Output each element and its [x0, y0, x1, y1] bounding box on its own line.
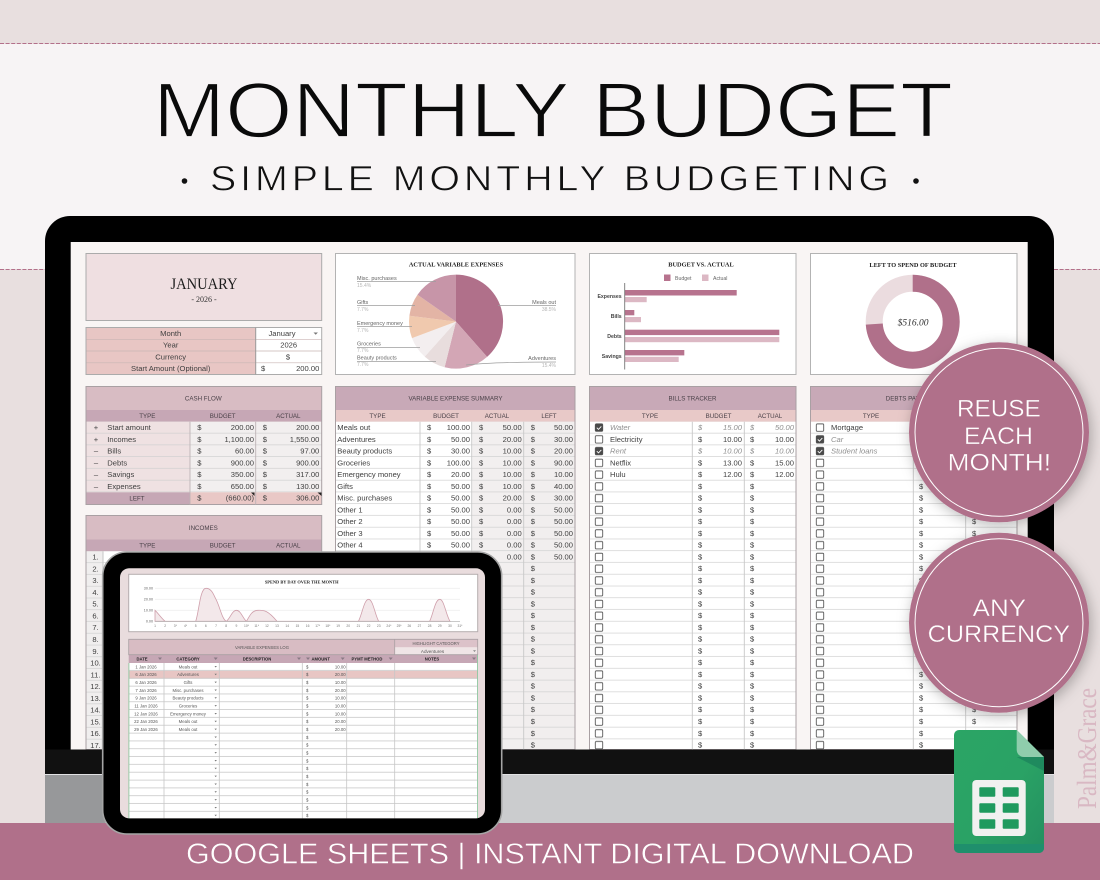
- panel: variable expense summary: 50.00: [554, 541, 573, 550]
- table: variable expenses log: 7 Jan 2026: [135, 688, 157, 693]
- table: variable expenses log: PYMT METHOD: [352, 657, 382, 662]
- checkboxes: [594, 422, 605, 750]
- panel: variable expense summary: 20.00: [451, 470, 470, 479]
- panel: variable expense summary: Other 3: [337, 529, 363, 538]
- panel: variable expense summary: $$$$$$$$$$$$$$$$$$$$$$$$$$$$: [531, 423, 536, 750]
- table: variable expenses log: VARIABLE EXPENSES LOG: [235, 645, 289, 650]
- panel: january heading: - 2026 -: [191, 295, 217, 304]
- badge: any currency: CURRENCY: [928, 621, 1070, 648]
- table: variable expenses log: Meals out: [179, 719, 198, 724]
- panel: pie chart actual variable expenses: Beauty products: [357, 356, 397, 362]
- panel: settings table: Start Amount (Optional): [131, 364, 211, 373]
- chart: spend by day over the month: 11*: [254, 624, 260, 628]
- panel: variable expense summary: LEFT: [541, 413, 557, 420]
- chart: spend by day over the month: 24*: [386, 624, 392, 628]
- panel: variable expense summary: 50.00: [554, 552, 573, 561]
- bars: [625, 290, 779, 362]
- screen background: [71, 242, 1028, 750]
- table: variable expenses log: DATE: [136, 657, 148, 662]
- panel: variable expense summary: 0.00: [507, 505, 522, 514]
- chart: spend by day over the month: 17*: [315, 624, 321, 628]
- panel: variable expense summary: Groceries: [337, 458, 370, 467]
- panel: variable expense summary: 10.00: [503, 458, 522, 467]
- panel: variable expense summary: 0.00: [507, 517, 522, 526]
- chart: spend by day over the month: 2: [164, 624, 166, 628]
- table: variable expenses log: 10.00: [335, 704, 346, 708]
- table: variable expenses log: 29 Jan 2026: [134, 727, 158, 732]
- panel: cash flow: $: [263, 435, 268, 444]
- panel: bills tracker: 12.00: [775, 470, 794, 479]
- panel: cash flow: Debts: [107, 458, 127, 467]
- table: variable expenses log: Beauty products: [172, 696, 204, 701]
- panel: cash flow: 1,550.00: [290, 435, 319, 444]
- chart: spend by day over the month: 31*: [458, 624, 463, 628]
- chart: spend by day over the month: SPEND BY DAY OVER THE MONTH: [265, 580, 339, 584]
- panel: cash flow: ACTUAL: [276, 413, 301, 420]
- panel: cash flow: 1,100.00: [224, 435, 254, 444]
- panel: variable expense summary: Other 2: [337, 517, 363, 526]
- panel: bills tracker: $: [697, 423, 703, 432]
- table: variable expenses log: Adventures: [421, 649, 445, 654]
- panel: pie chart actual variable expenses: 15.4%: [357, 283, 372, 289]
- chart: spend by day over the month: 26: [407, 624, 411, 628]
- panel: cash flow: $: [263, 458, 268, 467]
- panel: cash flow: $: [263, 470, 268, 479]
- panel: bills tracker: Hulu: [610, 470, 626, 479]
- panel: variable expense summary: 50.00: [451, 494, 470, 503]
- panel: incomes: 2.: [92, 564, 99, 573]
- chart: spend by day over the month: 29: [438, 624, 442, 628]
- panel: cash flow: –: [94, 458, 99, 467]
- panel: budget vs actual bar chart: Debts: [607, 334, 622, 340]
- panel: budget vs actual bar chart: [590, 254, 796, 374]
- panel: cash flow: +: [94, 435, 99, 444]
- table: variable expenses log: $$$$$$$$$$$$$$$$$$$$: [306, 664, 309, 818]
- panel: pie chart actual variable expenses: Meals out: [532, 300, 556, 306]
- table: variable expenses log: 10.00: [335, 696, 346, 701]
- panel: variable expense summary: 0.00: [507, 552, 522, 561]
- panel: cash flow: (660.00): [226, 494, 254, 503]
- chart: spend by day over the month: 30.00: [144, 587, 153, 591]
- panel: settings table: 2026: [280, 341, 297, 350]
- chart: spend by day over the month: 22: [367, 624, 371, 628]
- panel: settings table: Month: [160, 329, 181, 338]
- panel: cash flow: 200.00: [231, 423, 254, 432]
- panel: bills tracker: Electricity: [610, 435, 643, 444]
- panel: bills tracker: 50.00: [775, 423, 795, 432]
- chart: spend by day over the month: 18*: [325, 624, 331, 628]
- panel: settings table: Currency: [155, 352, 186, 362]
- table: variable expenses log: Adventures: [177, 672, 199, 677]
- panel: variable expense summary: 30.00: [451, 446, 470, 456]
- panel: incomes: 9.: [92, 647, 99, 656]
- chart: spend by day over the month: 30: [448, 624, 452, 628]
- panel: bills tracker: 13.00: [723, 458, 742, 467]
- panel: incomes: [86, 516, 322, 750]
- panel: cash flow: Bills: [107, 446, 121, 456]
- table: variable expenses log: 22 Jan 2026: [134, 719, 158, 724]
- panel: settings table: Year: [163, 341, 179, 350]
- subtitle: SIMPLE MONTHLY BUDGETING: [210, 159, 893, 198]
- panel: debts payments: DEBTS PAYMENTS: [886, 396, 941, 402]
- chart: spend by day over the month: 3*: [174, 624, 178, 628]
- table: variable expenses log: 20.00: [335, 719, 346, 724]
- panel: variable expense summary: 100.00: [447, 423, 470, 432]
- panel: bills tracker: $$$$$$$$$$$$$$$$$$$$$$$$$$: [698, 435, 703, 750]
- chart: spend by day over the month: 5: [195, 624, 197, 628]
- panel: bills tracker: 10.00: [775, 435, 794, 444]
- table: variable expenses log: 12 Jan 2026: [134, 711, 158, 716]
- chart: spend by day over the month: 9: [235, 624, 237, 628]
- panel: cash flow: $: [197, 435, 202, 444]
- badge: reuse each month: REUSE: [957, 396, 1041, 423]
- panel: incomes: 5.: [92, 600, 99, 609]
- chart: spend by day over the month: 28: [428, 624, 432, 628]
- checkboxes: [815, 422, 826, 750]
- panel: variable expense summary: BUDGET: [433, 413, 459, 420]
- panel: variable expense summary: 10.00: [554, 470, 573, 479]
- panel: variable expense summary: Meals out: [337, 423, 371, 432]
- panel: bills tracker: 15.00: [775, 458, 794, 467]
- panel: incomes: 6.: [92, 612, 99, 620]
- icon: google sheets: [954, 730, 1044, 853]
- panel: variable expense summary: VARIABLE EXPENSE SUMMARY: [408, 396, 502, 402]
- panel: left to spend donut chart: $516.00: [898, 318, 929, 328]
- table: variable expenses log: NOTES: [425, 657, 439, 662]
- chart: spend by day over the month: 21: [357, 624, 360, 628]
- panel: left to spend donut chart: [810, 254, 1017, 374]
- panel: cash flow: CASH FLOW: [185, 396, 222, 402]
- panel: incomes: 4.: [92, 588, 99, 597]
- chart: spend by day over the month: 25*: [397, 624, 402, 628]
- chart: spend by day over the month: 12: [265, 624, 269, 628]
- panel: cash flow: 306.00: [296, 494, 319, 503]
- panel: cash flow: 130.00: [296, 482, 319, 491]
- panel: variable expense summary: Emergency money: [337, 470, 401, 479]
- table: variable expenses log: HIGHLIGHT CATEGORY: [412, 641, 460, 646]
- panel: incomes: 10.: [90, 658, 101, 668]
- panel: cash flow: BUDGET: [210, 413, 236, 420]
- legend: [664, 274, 727, 282]
- panel: debts payments: $$$$$$$: [972, 505, 977, 750]
- table: variable expenses log: Groceries: [179, 704, 197, 708]
- panel: incomes: 1.: [92, 553, 99, 562]
- panel: cash flow: $: [197, 482, 202, 491]
- panel: variable expense summary: Gifts: [337, 482, 353, 491]
- panel: budget vs actual bar chart: BUDGET VS. ACTUAL: [668, 262, 734, 268]
- laptop monitor frame: [45, 216, 1054, 780]
- panel: pie chart actual variable expenses: 15.4%: [542, 363, 557, 369]
- panel: variable expense summary: 50.00: [451, 529, 470, 538]
- panel: variable expense summary: 90.00: [554, 458, 573, 467]
- panel: variable expense summary: 100.00: [447, 458, 470, 467]
- panel: variable expense summary: 20.00: [554, 446, 573, 456]
- panel: pie chart actual variable expenses: 7.7%: [357, 307, 369, 313]
- chart: spend by day over the month: 10.00: [144, 609, 153, 613]
- panel: variable expense summary: [336, 386, 575, 750]
- panel: settings table: [86, 328, 322, 374]
- panel: variable expense summary: 50.00: [554, 505, 573, 514]
- panel: variable expense summary: Other 4: [337, 541, 363, 550]
- table: variable expenses log: Meals out: [179, 727, 198, 732]
- chart: spend by day over the month: 27: [418, 624, 421, 628]
- panel: cash flow: $: [263, 446, 268, 456]
- panel: settings table: $: [261, 364, 266, 373]
- panel: pie chart actual variable expenses: Gifts: [357, 300, 369, 306]
- panel: variable expense summary: 50.00: [451, 541, 470, 550]
- chart: spend by day over the month: 1: [154, 624, 156, 628]
- panel: cash flow: Incomes: [107, 435, 136, 444]
- panel: pie chart actual variable expenses: 7.7%: [357, 348, 369, 354]
- chart: spend by day over the month: 10*: [244, 624, 250, 628]
- panel: cash flow: LEFT: [129, 496, 145, 502]
- legend: Budget: [675, 276, 692, 282]
- table: variable expenses log: 20.00: [335, 688, 346, 693]
- panel: incomes: 13.: [90, 694, 101, 703]
- panel: budget vs actual bar chart: Bills: [611, 314, 622, 320]
- panel: cash flow: $: [197, 470, 202, 479]
- panel: pie chart actual variable expenses: Emergency money: [357, 321, 403, 327]
- panel: incomes: 3.: [92, 576, 99, 585]
- panel: incomes: 17.: [90, 741, 101, 750]
- panel: variable expense summary: 30.00: [554, 494, 573, 503]
- panel: variable expense summary: 50.00: [451, 435, 470, 444]
- chart: spend by day over the month: 15: [296, 624, 299, 628]
- panel: cash flow: $: [197, 494, 202, 503]
- panel: cash flow: $: [197, 446, 202, 456]
- table: variable expenses log: Emergency money: [170, 711, 207, 716]
- panel: bills tracker: 15.00: [723, 423, 743, 432]
- tablet mockup: [103, 552, 502, 834]
- chart: spend by day over the month: 14: [285, 624, 289, 628]
- panel: budget vs actual bar chart: Savings: [602, 354, 622, 360]
- panel: cash flow: Savings: [107, 470, 135, 479]
- panel: bills tracker: $$$$$$$$$$$$$$$$$$$$$$$$$$: [750, 435, 755, 750]
- chart: spend by day over the month: 13: [275, 624, 279, 628]
- panel: debts payments: [810, 386, 1017, 750]
- panel: bills tracker: $: [749, 423, 755, 432]
- panel: variable expense summary: 10.00: [503, 446, 522, 456]
- chart: spend by day over the month: 23: [377, 624, 381, 628]
- panel: debts payments: Car: [831, 435, 844, 444]
- panel: variable expense summary: Misc. purchases: [337, 494, 392, 503]
- chart: spend by day over the month: 4*: [184, 624, 188, 628]
- panel: debts payments: TYPE: [863, 413, 879, 420]
- table: variable expenses log: 1 Jan 2026: [135, 664, 157, 669]
- chart: spend by day over the month: 19: [336, 624, 340, 628]
- panel: cash flow: $: [263, 482, 268, 491]
- panel: variable expense summary: Adventures: [337, 435, 376, 444]
- panel: variable expense summary: $$$$$$$$$$$: [479, 423, 484, 550]
- panel: incomes: ACTUAL: [276, 542, 301, 549]
- panel: pie chart actual variable expenses: Groceries: [357, 342, 381, 348]
- panel: debts payments: Mortgage: [831, 423, 863, 432]
- panel: bills tracker: 10.00: [723, 446, 743, 456]
- panel: variable expense summary: 20.00: [503, 435, 522, 444]
- panel: january heading: [86, 254, 322, 320]
- panel: cash flow: $: [263, 423, 268, 432]
- panel: cash flow: TYPE: [139, 413, 155, 420]
- panel: debts payments: $$$$$$$$$$$$$$$$$$$$$$$: [919, 482, 924, 750]
- panel: variable expense summary: $$$$$$$$$$$: [427, 423, 432, 550]
- chart: spend by day over the month: 8: [225, 624, 227, 628]
- panel: pie chart actual variable expenses: [336, 254, 575, 374]
- table: variable expenses log: 10.00: [335, 664, 346, 669]
- panel: incomes: TYPE: [139, 542, 155, 549]
- panel: variable expense summary: 10.00: [503, 470, 522, 479]
- panel: bills tracker: BUDGET: [706, 413, 732, 420]
- table: variable expenses log: 20.00: [335, 727, 346, 732]
- panel: incomes: 11.: [90, 670, 100, 679]
- panel: pie chart actual variable expenses: 7.7%: [357, 362, 369, 368]
- panel: cash flow: 350.00: [231, 470, 254, 479]
- panel: variable expense summary: 10.00: [503, 482, 522, 491]
- chart: spend by day over the month: 0.00: [146, 620, 153, 624]
- table: variable expenses log: 20.00: [335, 672, 346, 677]
- badge: any currency: [909, 533, 1089, 713]
- panel: incomes: 16.: [90, 729, 101, 738]
- panel: variable expense summary: 0.00: [507, 529, 522, 538]
- chart: spend by day over the month: 20.00: [144, 598, 153, 602]
- panel: bills tracker: $: [749, 446, 755, 456]
- panel: settings table: 200.00: [296, 364, 319, 373]
- panel: bills tracker: Rent: [610, 446, 627, 456]
- badge: reuse each month: EACH: [964, 423, 1033, 450]
- badge: any currency: ANY: [973, 595, 1026, 622]
- panel: settings table: January: [268, 329, 296, 338]
- panel: cash flow: 650.00: [231, 482, 254, 491]
- panel: cash flow: $: [263, 494, 268, 503]
- panel: variable expense summary: 40.00: [554, 482, 573, 491]
- panel: bills tracker: Water: [610, 423, 631, 432]
- chart: spend by day over the month: [129, 574, 478, 632]
- panel: cash flow: [86, 386, 322, 504]
- panel: cash flow: 317.00: [296, 470, 319, 479]
- panel: cash flow: $: [197, 423, 202, 432]
- panel: bills tracker: ACTUAL: [758, 413, 783, 420]
- panel: cash flow: 200.00: [296, 423, 319, 432]
- panel: pie chart actual variable expenses: 38.5%: [542, 307, 557, 313]
- panel: variable expense summary: 50.00: [554, 423, 573, 432]
- panel: cash flow: Expenses: [107, 482, 141, 491]
- panel: incomes: BUDGET: [210, 542, 236, 549]
- panel: bills tracker: TYPE: [642, 413, 658, 420]
- chart: spend by day over the month: 7: [215, 624, 217, 628]
- panel: cash flow: 60.00: [235, 446, 254, 456]
- panel: pie chart actual variable expenses: Misc. purchases: [357, 276, 397, 282]
- table: variable expenses log: 10.00: [335, 680, 346, 685]
- table: variable expenses log: Misc. purchases: [172, 688, 204, 693]
- panel: variable expense summary: 50.00: [554, 529, 573, 538]
- panel: bills tracker: $: [697, 446, 703, 456]
- table: variable expenses log: [129, 639, 478, 819]
- panel: debts payments: Student loans: [831, 446, 878, 456]
- table: variable expenses log: 9 Jan 2026: [135, 696, 157, 701]
- panel: bills tracker: 12.00: [723, 470, 742, 479]
- footer text: GOOGLE SHEETS | INSTANT DIGITAL DOWNLOAD: [186, 838, 914, 870]
- bottom band: [0, 823, 1100, 880]
- panel: cash flow: 900.00: [296, 458, 319, 467]
- panel: variable expense summary: TYPE: [369, 413, 386, 420]
- panel: cash flow: 900.00: [231, 458, 254, 467]
- panel: incomes: 8.: [92, 635, 99, 644]
- legend: Actual: [713, 276, 727, 282]
- panel: bills tracker: 10.00: [775, 446, 795, 456]
- table: variable expenses log: 6 Jan 2026: [135, 672, 157, 677]
- panel: variable expense summary: Beauty products: [337, 446, 392, 456]
- panel: january heading: JANUARY: [170, 276, 238, 293]
- panel: variable expense summary: 30.00: [554, 435, 573, 444]
- panel: variable expense summary: 50.00: [554, 517, 573, 526]
- pie slices: [409, 275, 503, 369]
- panel: variable expense summary: 50.00: [451, 505, 470, 514]
- badge: reuse each month: [909, 342, 1089, 522]
- panel: bills tracker: Netflix: [610, 458, 631, 467]
- table: variable expenses log: Gifts: [184, 680, 192, 685]
- panel: budget vs actual bar chart: Expenses: [597, 294, 622, 300]
- table: variable expenses log: CATEGORY: [176, 657, 200, 662]
- laptop chin and base: [45, 750, 1054, 823]
- panel: cash flow: Start amount: [107, 423, 152, 432]
- panel: variable expense summary: Other 1: [337, 505, 363, 514]
- panel: variable expense summary: 50.00: [451, 482, 470, 491]
- panel: pie chart actual variable expenses: Adventures: [528, 356, 556, 362]
- panel: settings table: $: [286, 352, 291, 362]
- panel: variable expense summary: ACTUAL: [485, 413, 510, 420]
- panel: incomes: 7.: [92, 623, 99, 632]
- panel: bills tracker: [590, 386, 796, 750]
- panel: incomes: 12.: [90, 682, 101, 691]
- panel: left to spend donut chart: LEFT TO SPEND OF BUDGET: [869, 262, 957, 269]
- table: variable expenses log: DESCRIPTION: [243, 657, 271, 662]
- chart: spend by day over the month: 16: [306, 624, 310, 628]
- panel: incomes: 14.: [90, 706, 101, 715]
- table: variable expenses log: Meals out: [179, 664, 198, 669]
- panel: pie chart actual variable expenses: 7.7%: [357, 328, 369, 334]
- table: variable expenses log: 10.00: [335, 711, 346, 716]
- panel: cash flow: +: [94, 423, 99, 432]
- panel: variable expense summary: 20.00: [503, 494, 522, 503]
- panel: cash flow: –: [94, 470, 99, 479]
- table: variable expenses log: AMOUNT: [312, 657, 330, 662]
- panel: bills tracker: 10.00: [723, 435, 742, 444]
- table: variable expenses log: 11 Jan 2026: [134, 704, 158, 708]
- panel: variable expense summary: 50.00: [451, 517, 470, 526]
- panel: variable expense summary: 0.00: [507, 541, 522, 550]
- chart: spend by day over the month: 20: [346, 624, 350, 628]
- panel: incomes: INCOMES: [189, 525, 218, 532]
- panel: cash flow: 97.00: [300, 446, 319, 456]
- title: MONTHLY BUDGET: [153, 66, 953, 154]
- panel: variable expense summary: 50.00: [503, 423, 522, 432]
- panel: cash flow: –: [94, 446, 99, 456]
- panel: cash flow: –: [94, 482, 99, 491]
- panel: cash flow: $: [197, 458, 202, 467]
- badge: reuse each month: MONTH!: [948, 450, 1051, 477]
- table: variable expenses log: 6 Jan 2026: [135, 680, 157, 685]
- panel: pie chart actual variable expenses: ACTUAL VARIABLE EXPENSES: [409, 262, 504, 268]
- panel: incomes: 15.: [90, 717, 101, 726]
- panel: bills tracker: BILLS TRACKER: [668, 396, 717, 402]
- chart: spend by day over the month: 6: [205, 624, 207, 628]
